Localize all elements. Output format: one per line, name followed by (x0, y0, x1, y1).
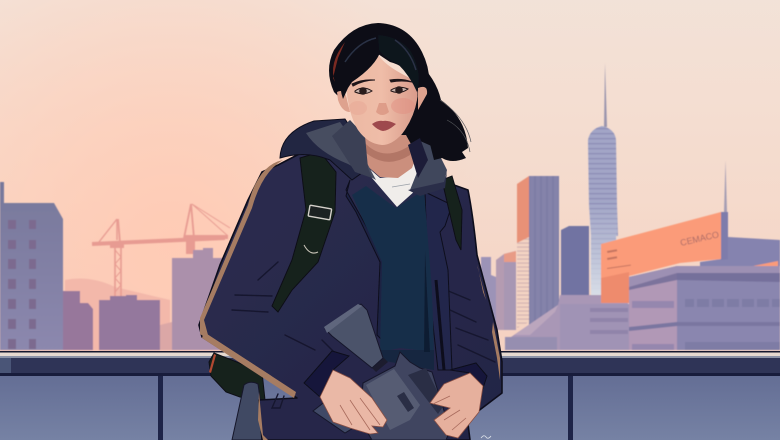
building: low mauve (63, 291, 93, 350)
ear left (337, 91, 350, 112)
left hand (320, 370, 387, 434)
eye right (391, 86, 408, 94)
building: large front (629, 266, 780, 350)
white tee (364, 158, 418, 207)
strap ring (304, 245, 318, 253)
right hand (430, 373, 483, 438)
building: far left with windows (0, 182, 63, 350)
crane: left (92, 219, 225, 296)
brows (352, 80, 375, 86)
backpack base (209, 353, 265, 400)
left cuff (304, 351, 349, 397)
blush (391, 98, 415, 114)
spire (604, 63, 607, 127)
hood (280, 119, 447, 196)
right cuff (450, 363, 487, 388)
woman figure (199, 23, 502, 440)
backpack strap: right (442, 176, 462, 250)
rifle stock (313, 400, 358, 433)
building: mid block (505, 295, 629, 350)
bottle holster (232, 382, 266, 440)
backpack strap: left (272, 152, 336, 312)
face (337, 54, 427, 145)
lapel left (346, 180, 384, 340)
tan trim: right arm (477, 265, 500, 380)
neck (364, 135, 417, 178)
rifle (313, 304, 450, 440)
sweater (352, 186, 434, 352)
skyline: left buildings and cranes (0, 182, 230, 350)
building: mauve block (99, 295, 160, 350)
building: pale block (172, 248, 226, 350)
hair behind neck (352, 95, 440, 165)
jacket folds (232, 262, 495, 408)
tan trim: lower body (258, 392, 268, 440)
office tower with orange face (517, 176, 559, 328)
lips (372, 121, 396, 131)
antenna (724, 160, 727, 212)
hair crown (329, 23, 429, 100)
strap buckle (308, 205, 332, 220)
building: behind billboard (700, 237, 780, 300)
skyline: right buildings (481, 63, 780, 350)
jacket (199, 141, 502, 440)
lapel right (425, 192, 452, 370)
rooftop railing (0, 351, 780, 440)
tan trim: left arm (200, 160, 297, 396)
eye left (355, 87, 372, 95)
crane: right (184, 204, 230, 254)
rifle barrel (325, 304, 383, 368)
ear right (418, 87, 427, 110)
building: dark violet (561, 226, 589, 297)
billboard (601, 212, 728, 303)
hair bangs (340, 35, 381, 99)
building: small left stack (481, 251, 516, 340)
tower (588, 126, 618, 296)
nose (376, 103, 389, 115)
orange sliver (748, 261, 778, 268)
hair back, falling over hood (416, 60, 471, 161)
billboard text: CEMACO (679, 229, 720, 248)
rifle body (360, 352, 450, 440)
